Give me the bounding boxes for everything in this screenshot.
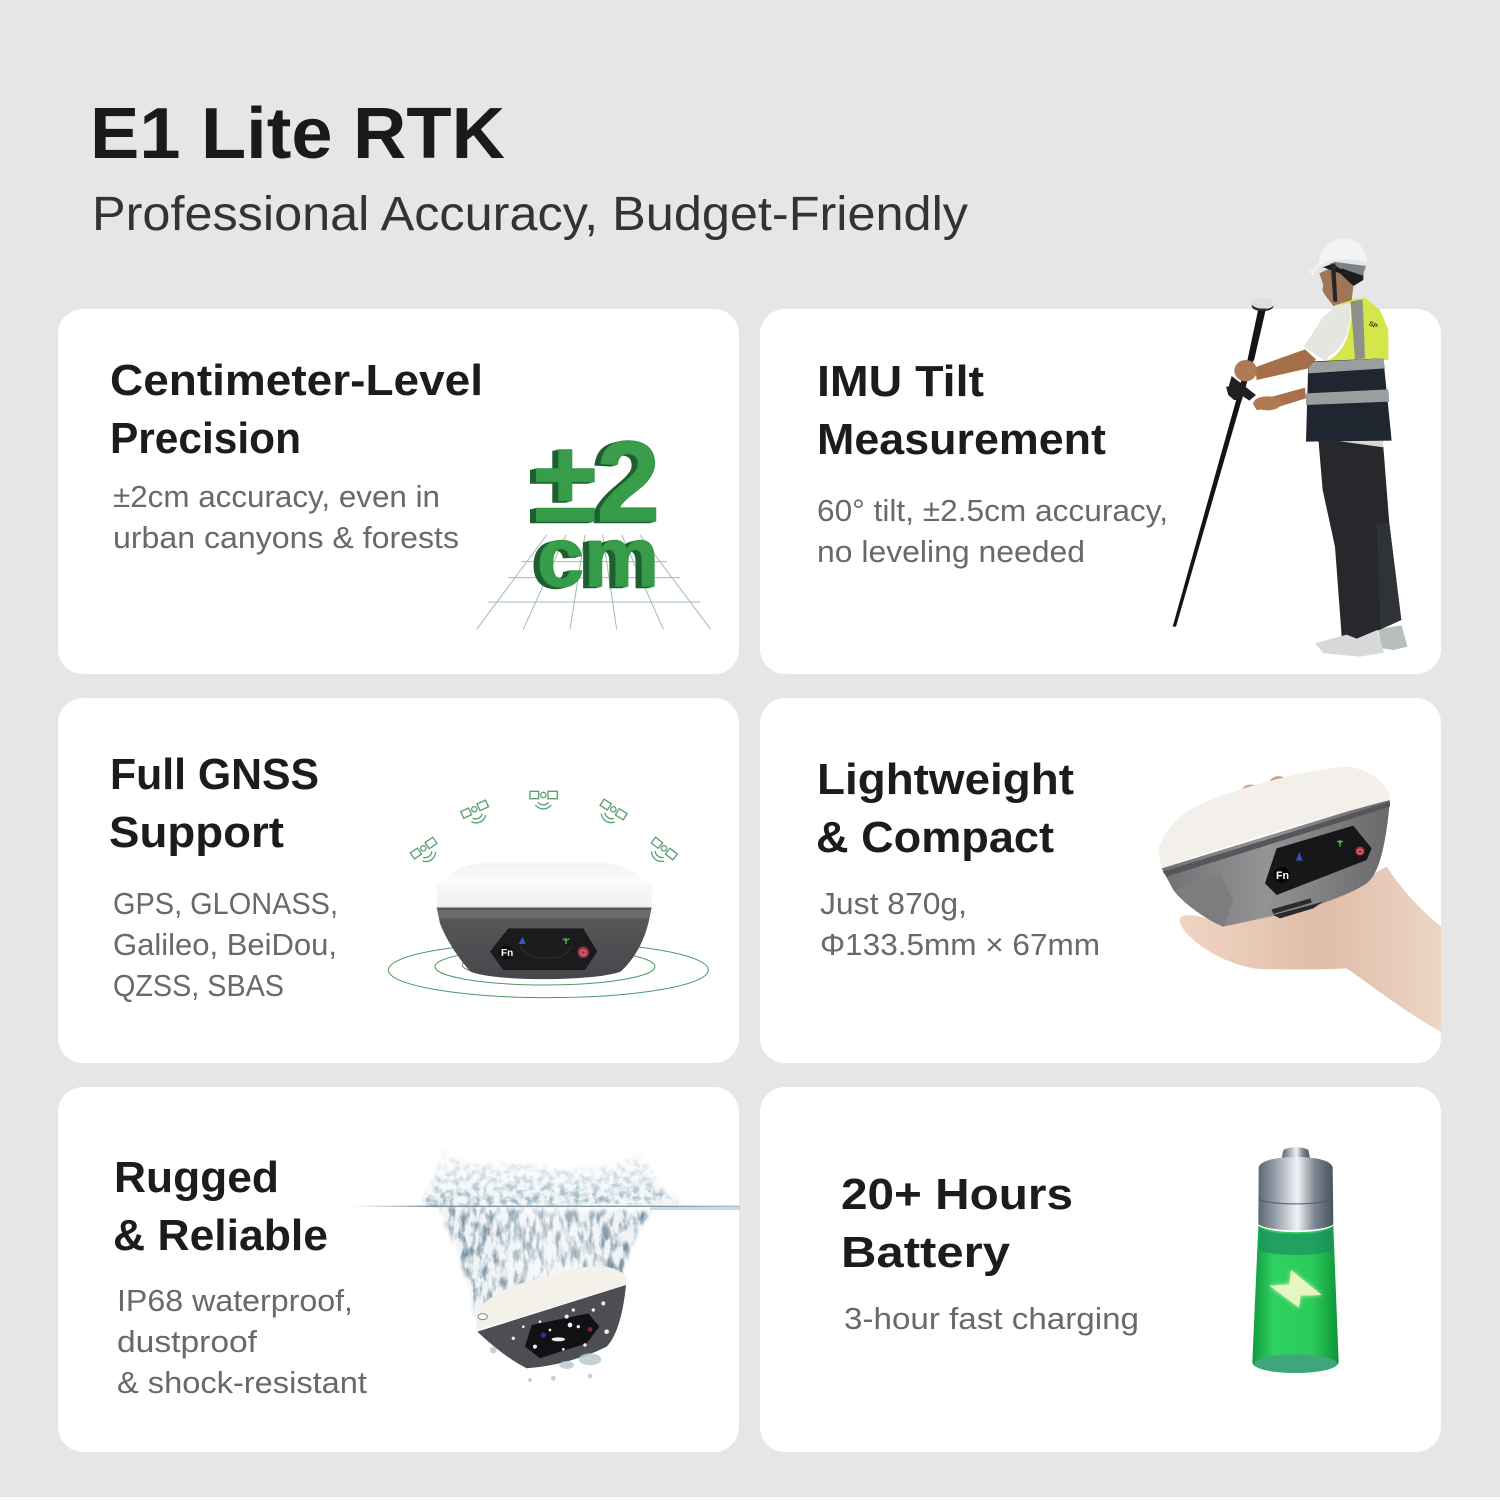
- vest print: SP: [1367, 320, 1379, 331]
- silver cap: [1258, 1157, 1333, 1230]
- back arm: [1253, 388, 1306, 410]
- panel: centimeter-level precision: [58, 309, 739, 674]
- splash above water: [422, 1147, 683, 1207]
- bubbles: [490, 1347, 601, 1382]
- subtitle: Professional Accuracy, Budget-Friendly: [92, 188, 968, 241]
- icon: 3D ±2cm over perspective grid: ±2: [534, 419, 660, 546]
- card background: [760, 698, 1441, 1063]
- shirt hem: [1317, 435, 1383, 447]
- description: 60° tilt, ±2.5cm accuracy,: [817, 493, 1168, 528]
- card background: [58, 698, 739, 1063]
- receiver body: [477, 1285, 626, 1368]
- panel: full GNSS support: [58, 698, 739, 1063]
- splash rim bubble: [478, 1314, 487, 1320]
- face and neck: [1319, 267, 1353, 306]
- panel: IMU tilt measurement: [760, 238, 1441, 674]
- panel handle recess: [520, 947, 572, 958]
- body facet shade: [1173, 875, 1233, 927]
- signal rings: [388, 942, 708, 998]
- Fn button: Fn: [501, 948, 513, 959]
- heading: 20+ Hours: [841, 1170, 1073, 1219]
- back leg shade: [1377, 523, 1401, 629]
- body seam: [437, 910, 651, 918]
- power button: [1355, 846, 1365, 856]
- hand: [1180, 867, 1441, 1032]
- description: [113, 479, 459, 555]
- heading: Centimeter-Level: [110, 356, 483, 405]
- seam: [1163, 802, 1390, 877]
- control panel: [490, 928, 597, 970]
- receiver dome: [1158, 767, 1390, 868]
- status icons: [519, 937, 569, 944]
- front hand: [1234, 360, 1257, 381]
- lightning bolt: [1269, 1270, 1322, 1308]
- lightning bolt glow: [1269, 1270, 1322, 1308]
- description: [820, 886, 1100, 962]
- controller and bracket: [1226, 376, 1256, 401]
- control panel: [525, 1313, 599, 1358]
- waterline: [350, 1206, 740, 1210]
- receiver on pole: [1251, 298, 1273, 311]
- trousers: [1318, 438, 1401, 639]
- status icons: [1296, 840, 1343, 861]
- heading: Precision: [110, 414, 301, 463]
- card background: [58, 1087, 739, 1452]
- description: [817, 493, 1168, 569]
- heading: [109, 750, 319, 857]
- card background: [58, 309, 739, 674]
- icon: 3D ±2cm over perspective grid: [477, 419, 711, 629]
- Fn button: Fn: [1276, 870, 1289, 882]
- heading: [113, 1153, 328, 1260]
- icon: 3D ±2cm over perspective grid: cm: [537, 510, 659, 604]
- panel: rugged and reliable: [58, 1087, 740, 1452]
- hair: [1320, 263, 1363, 286]
- description: IP68 waterproof,: [117, 1283, 353, 1318]
- bottom edge strip: [0, 1497, 1500, 1500]
- front arm: [1255, 349, 1316, 380]
- receiver dome: [475, 1266, 627, 1330]
- description: no leveling needed: [817, 534, 1085, 569]
- battery base: [1254, 1354, 1337, 1373]
- description: ±2cm accuracy, even in: [113, 479, 440, 514]
- description: [113, 886, 338, 1003]
- reflective stripes: [1306, 358, 1389, 405]
- description: dustproof: [117, 1324, 257, 1359]
- title: E1 Lite RTK: [90, 94, 505, 174]
- vest shoulder stripe: [1351, 299, 1365, 359]
- heading: Measurement: [817, 415, 1106, 464]
- bottom ports: [1272, 898, 1323, 918]
- panel: 20+ hours battery: [760, 1087, 1441, 1452]
- heading: [816, 755, 1074, 862]
- icon: charging battery: [1252, 1147, 1339, 1373]
- illustration: receiver splashing into water: [350, 1147, 740, 1382]
- card background: [760, 309, 1441, 674]
- droplets on panel: [512, 1301, 609, 1351]
- heading: Battery: [841, 1228, 1011, 1277]
- heading: [841, 1170, 1073, 1277]
- illustration: surveyor holding tilted RTK pole: [1173, 238, 1407, 657]
- front shoe: [1315, 630, 1384, 657]
- illustration: receiver held in hand: [1158, 767, 1441, 1032]
- description: Galileo, BeiDou,: [113, 927, 337, 962]
- vest lower: [1306, 358, 1392, 442]
- description: & shock-resistant: [117, 1365, 367, 1400]
- heading: & Compact: [816, 813, 1054, 862]
- heading: IMU Tilt: [817, 357, 984, 406]
- survey pole: [1173, 307, 1266, 627]
- control panel: [1265, 826, 1372, 895]
- splash below water: [438, 1207, 652, 1315]
- darker upper band: [1259, 1228, 1332, 1255]
- heading: [110, 356, 483, 463]
- heading: [817, 357, 1106, 464]
- power button: [578, 947, 589, 958]
- description: QZSS, SBAS: [113, 968, 284, 1003]
- cap ring: [1259, 1198, 1333, 1204]
- description: Φ133.5mm × 67mm: [820, 927, 1100, 962]
- back shoe: [1378, 625, 1407, 650]
- helmet strap: [1331, 263, 1337, 302]
- panel: lightweight and compact: [760, 698, 1441, 1063]
- heading: & Reliable: [113, 1211, 328, 1260]
- card background: [760, 1087, 1441, 1452]
- heading: Rugged: [114, 1153, 279, 1202]
- Fn button: [1274, 867, 1290, 883]
- satellites: [410, 791, 677, 868]
- shirt: [1304, 304, 1350, 362]
- receiver body: [1162, 798, 1390, 927]
- description: 3-hour fast charging: [844, 1301, 1139, 1336]
- helmet: [1310, 238, 1367, 276]
- battery terminal: [1282, 1147, 1310, 1158]
- heading: Support: [109, 808, 284, 857]
- heading: Lightweight: [817, 755, 1074, 804]
- description: [117, 1283, 367, 1400]
- receiver body: [437, 907, 652, 979]
- illustration: receiver with satellites and signal rings: [388, 791, 708, 998]
- fingertips: [1242, 776, 1287, 790]
- description: Just 870g,: [820, 886, 967, 921]
- heading: Full GNSS: [110, 750, 319, 799]
- green cell: [1252, 1226, 1339, 1373]
- helmet band: [1333, 262, 1366, 276]
- description: GPS, GLONASS,: [113, 886, 338, 921]
- description: urban canyons & forests: [113, 520, 459, 555]
- receiver dome: [437, 863, 652, 907]
- high-vis vest upper: [1327, 298, 1388, 361]
- lower hand: [1253, 396, 1281, 410]
